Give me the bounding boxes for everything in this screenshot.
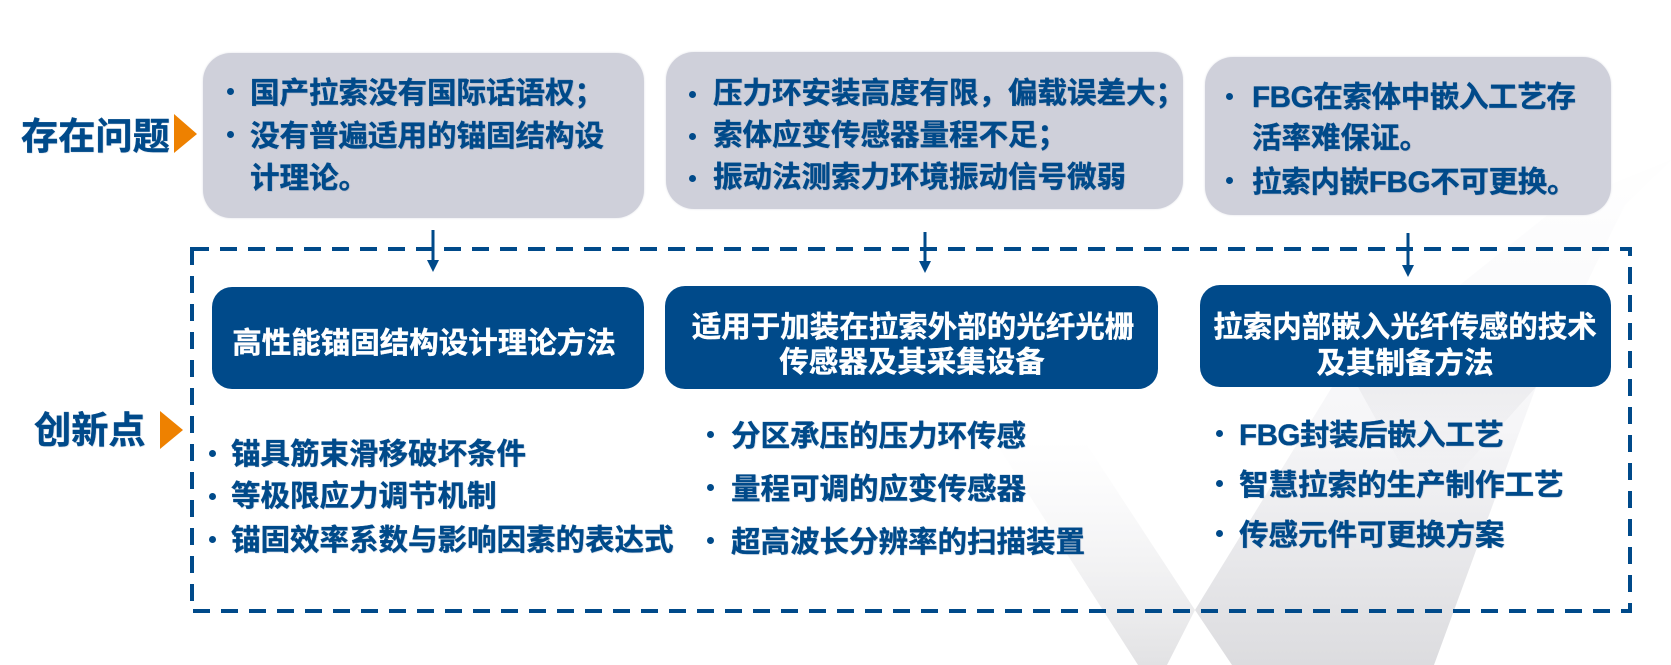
bullet list: problem 3: 拉索内嵌FBG不可更换。 [1252, 166, 1576, 199]
list: innovation 2 points [707, 420, 1085, 559]
list: innovation 3 points [1216, 419, 1564, 552]
heading box: innovation 3 [1200, 285, 1611, 387]
heading box: innovation 1 [212, 287, 644, 389]
bullet list: problem 2 [689, 77, 1185, 194]
list: innovation 3 points: 传感元件可更换方案 [1239, 519, 1505, 552]
bullet list: problem 3 [1226, 81, 1576, 199]
heading text: innovation 3: 拉索内部嵌入光纤传感的技术 [1213, 311, 1597, 344]
panel: problem 2 [666, 52, 1183, 209]
heading text: innovation 3: 及其制备方法 [1316, 347, 1494, 380]
bullet list: problem 1: 没有普遍适用的锚固结构设 [250, 120, 604, 153]
list: innovation 1 points: 锚固效率系数与影响因素的表达式 [231, 524, 674, 557]
bullet list: problem 3: FBG在索体中嵌入工艺存 [1252, 81, 1576, 114]
heading text: innovation 1: 高性能锚固结构设计理论方法 [232, 327, 616, 360]
list: innovation 1 points [209, 438, 674, 557]
heading text: innovation 2 [692, 311, 1134, 379]
heading text: innovation 2: 传感器及其采集设备 [779, 346, 1045, 379]
heading box: innovation 2 [665, 286, 1158, 389]
bullet list: problem 2: 振动法测索力环境振动信号微弱 [713, 161, 1126, 194]
panel: problem 1 [203, 53, 644, 218]
list: innovation 2 points: 量程可调的应变传感器 [731, 473, 1026, 506]
bullet list: problem 2: 压力环安装高度有限，偏载误差大； [713, 77, 1185, 110]
list: innovation 1 points: 锚具筋束滑移破坏条件 [231, 438, 526, 471]
list: innovation 2 points: 超高波长分辨率的扫描装置 [731, 526, 1085, 559]
bullet list: problem 1: 计理论。 [250, 162, 368, 195]
list: innovation 2 points: 分区承压的压力环传感 [731, 420, 1026, 453]
bullet list: problem 1 [227, 77, 604, 195]
bullet list: problem 1: 国产拉索没有国际话语权； [250, 77, 604, 110]
label: 存在问题: 存在问题 [21, 115, 170, 157]
list: innovation 3 points: FBG封装后嵌入工艺 [1239, 419, 1503, 452]
bullet list: problem 3: 活率难保证。 [1252, 122, 1429, 155]
heading text: innovation 3 [1213, 311, 1597, 380]
label: 创新点: 创新点 [34, 409, 146, 451]
panel: problem 3 [1205, 57, 1611, 215]
list: innovation 1 points: 等极限应力调节机制 [231, 480, 497, 513]
bullet list: problem 2: 索体应变传感器量程不足； [713, 119, 1067, 152]
list: innovation 3 points: 智慧拉索的生产制作工艺 [1239, 469, 1564, 502]
heading text: innovation 2: 适用于加装在拉索外部的光纤光栅 [692, 311, 1134, 344]
